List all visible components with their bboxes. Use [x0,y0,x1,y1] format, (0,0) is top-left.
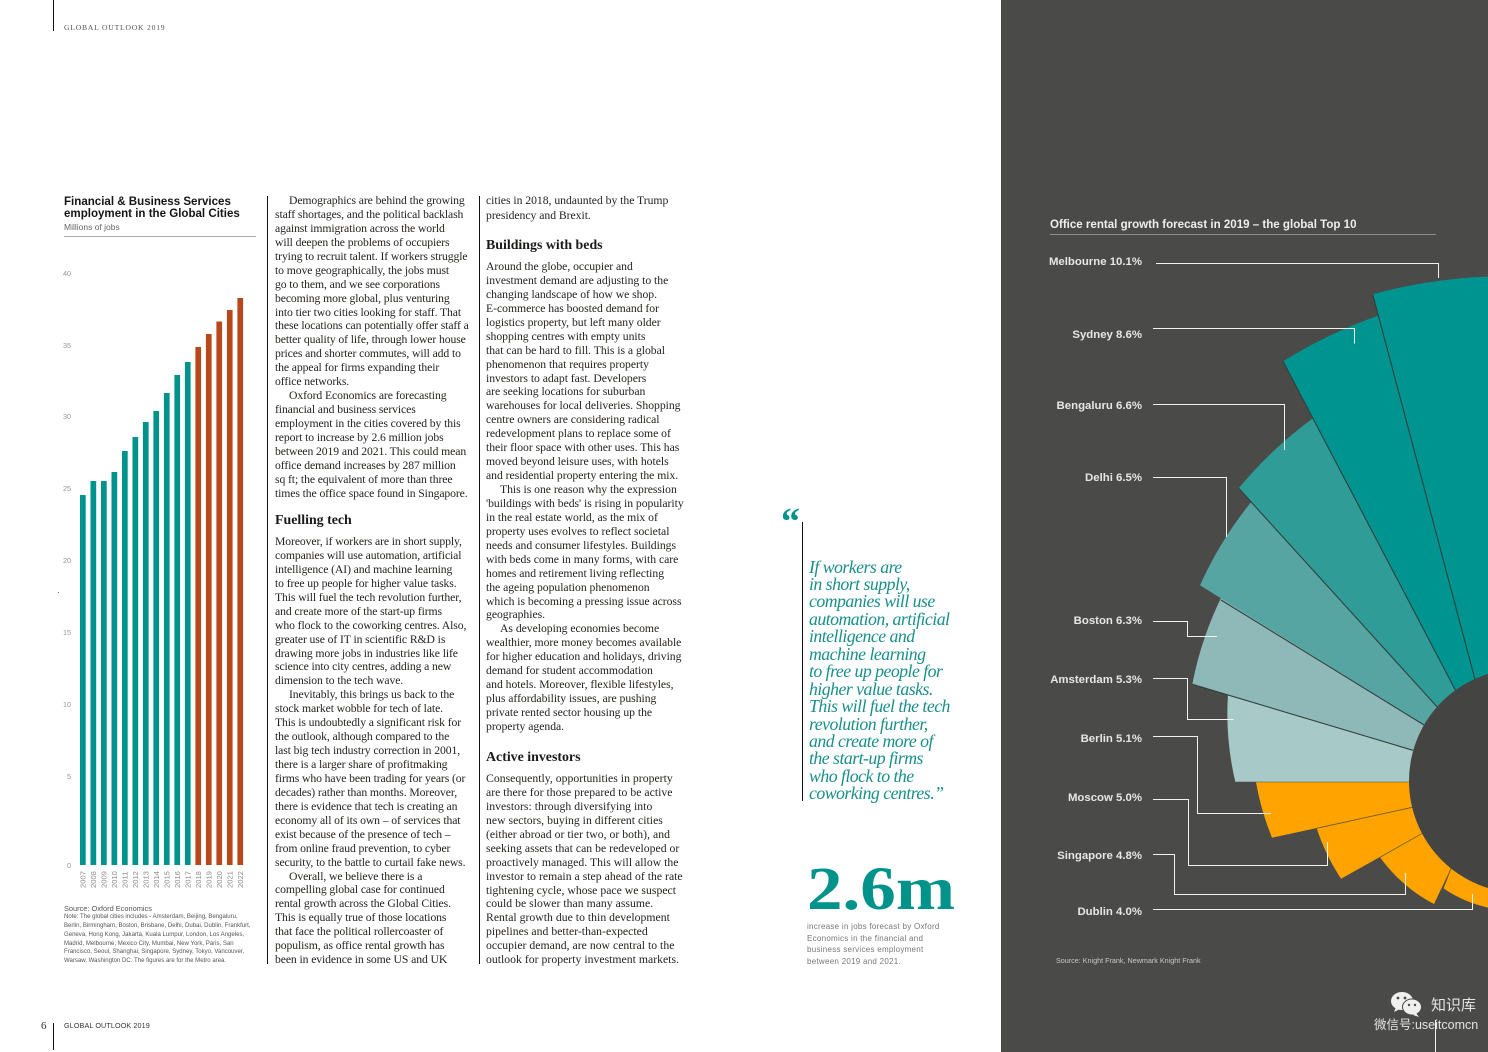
bar chart: employment: 2015 [162,871,171,888]
city labels: Boston 6.3% [1074,615,1142,627]
bar chart: employment: 2017 [183,871,192,888]
chart source and note: Note: The global cities includes - Amsterdam, Beijing, Bengaluru, Berlin, Birmingham, Boston, Brisbane, Delhi, Dubai, Dublin, Frankfurt, Geneva, Hong Kong, Jakarta, Kuala Lumpur, London, Los Angeles, Madrid, Melbourne, Mexico City, Mumbai, New York, Paris, San Francisco, Seoul, Shanghai, Singapore, Sydney, Tokyo, Vancouver, Warsaw, Washington DC. The figures are for the Metro area. [64,914,251,964]
city labels: Amsterdam 5.3% [1050,674,1142,686]
chart heading [64,196,256,237]
bar chart: employment: 10 [63,700,71,709]
city labels: Moscow 5.0% [1068,792,1142,804]
city labels: Bengaluru 6.6% [1057,400,1142,412]
city labels: Berlin 5.1% [1081,733,1142,745]
bar chart: employment: 0 [67,861,71,870]
bar chart: employment: 2010 [110,871,119,888]
carry-over text: cities in 2018, undaunted by the Trump presidency and Brexit. [486,194,668,222]
city labels: Melbourne 10.1% [1049,256,1142,268]
bar chart: employment: 25 [63,484,71,493]
Active investors text: Consequently, opportunities in property are there for those prepared to be active investors: through diversifying into new sectors, buying in different cities (either abroad or tier two, or both), and seeking assets that can be redeveloped or proactively managed. This will allow the investor to remain a step ahead of the rate tightening cycle, whose pace we suspect could be slower than many assume. Rental growth due to thin development pipelines and better-than-expected occupier demand, are now central to the outlook for property investment markets. [486,772,683,966]
icon: chat bubbles [1391,992,1421,1017]
bar chart: employment: 2018 [194,871,203,888]
stat caption: increase in jobs forecast by Oxford Economics in the financial and business services employment between 2019 and 2021. [807,922,940,966]
leader lines [1153,264,1472,910]
bar chart: employment: 2014 [152,871,161,888]
bar chart: employment: 2022 [236,871,245,888]
Buildings with beds text: Around the globe, occupier and investment demand are adjusting to the changing landscape of how we shop. E-commerce has boosted demand for logistics property, but left many older shopping centres with empty units that can be hard to fill. This is a global phenomenon that requires property investors to adapt fast. Developers are seeking locations for suburban warehouses for local deliveries. Shopping centre owners are considering radical redevelopment plans to replace some of their floor space with other uses. This has moved beyond leisure uses, with hotels and residential property entering the mix. This is one reason why the expression 'buildings with beds' is rising in popularity in the real estate world, as the mix of property uses evolves to reflect societal needs and consumer lifestyles. Buildings with beds come in many forms, with care homes and retirement living reflecting the ageing population phenomenon which is becoming a pressing issue across geographies. As developing economies become wealthier, more money becomes available for higher education and holidays, driving demand for student accommodation and hotels. Moreover, flexible lifestyles, plus affordability issues, are pushing private rented sector housing up the property agenda. [486,260,684,733]
bar chart: employment: 2019 [204,871,213,888]
page footer: GLOBAL OUTLOOK 2019 [64,1021,150,1030]
bar chart: employment: 2009 [100,871,108,888]
chart title: Office rental growth forecast in 2019 – the global Top 10 [1050,219,1356,231]
watermark: 微信号:useitcomcn [1374,1018,1478,1032]
bar chart: employment: 2020 [215,871,224,888]
panel: rental growth [1001,0,1488,1052]
bar chart: employment: 20 [63,556,71,565]
intro paragraphs: Demographics are behind the growing staff shortages, and the political backlash against immigration across the world will deepen the problems of occupiers trying to recruit talent. If workers struggle to move geographically, the jobs must go to them, and we see corporations becoming more global, plus venturing into tier two cities looking for staff. That these locations can potentially offer staff a better quality of life, through lower house prices and shorter commutes, will add to the appeal for firms expanding their office networks. Oxford Economics are forecasting financial and business services employment in the cities covered by this report to increase by 2.6 million jobs between 2019 and 2021. This could mean office demand increases by 287 million sq ft; the equivalent of more than three times the office space found in Singapore. [275,194,469,500]
bar chart: employment: 5 [67,772,71,781]
key statistic [807,856,955,966]
city labels: Delhi 6.5% [1085,472,1142,484]
chart hub [1409,669,1488,893]
heading: Fuelling tech: Fuelling tech [275,513,352,528]
page footer: 6 [41,1020,46,1032]
heading: Buildings with beds: Buildings with beds [486,238,603,253]
bar chart: employment: 2013 [141,871,150,888]
quotation mark: “ [781,500,800,542]
bar chart: employment: 2007 [78,871,88,888]
bar chart: employment [58,269,245,888]
bar chart: employment: 2016 [173,871,182,888]
pull quote [781,500,950,803]
chart source and note: Source: Oxford Economics [64,904,152,913]
bar chart: employment: 40 [63,269,71,278]
city labels: Dublin 4.0% [1077,906,1142,918]
chart title [1050,218,1436,235]
quote text: If workers are in short supply, companies will use automation, artificial intelligence and machine learning to free up people for higher value tasks. This will fuel the tech revolution further, and create more of the start-up firms who flock to the coworking centres.” [809,556,950,803]
bar chart: employment: 30 [63,412,71,421]
city labels: Singapore 4.8% [1057,850,1142,862]
heading: Active investors: Active investors [486,750,581,765]
page footer [41,1020,150,1050]
bar chart: employment: 2012 [131,871,140,888]
page header: GLOBAL OUTLOOK 2019 [64,23,165,32]
bar chart: employment: 2008 [89,871,98,888]
chart heading: Millions of jobs [64,222,120,232]
Fuelling tech text: Moreover, if workers are in short supply, companies will use automation, artificial intelligence (AI) and machine learning to free up people for higher value tasks. This will fuel the tech revolution further, and create more of the start-up firms who flock to the coworking centres. Also, greater use of IT in scientific R&D is drawing more jobs in industries like life science into city centres, adding a new dimension to the tech wave. Inevitably, this brings us back to the stock market wobble for tech of late. This is undoubtedly a significant risk for the outlook, although compared to the last big tech industry correction in 2001, there is a larger share of profitmaking firms who have been trading for years (or decades) rather than months. Moreover, there is evidence that tech is creating an economy all of its own – of services that exist because of the presence of tech – from online fraud prevention, to cyber security, to the battle to curtail fake news. Overall, we believe there is a compelling global case for continued rental growth across the Global Cities. This is equally true of those locations that face the political rollercoaster of populism, as office rental growth has been in evidence in some US and UK [275,535,466,966]
big number: 2.6m [807,856,955,923]
watermark: 知识库 [1431,994,1476,1015]
chart source: Source: Knight Frank, Newmark Knight Frank [1056,956,1201,965]
city labels: Sydney 8.6% [1072,329,1142,341]
bar chart: employment: 2021 [225,871,234,888]
bar chart: employment: 15 [63,628,71,637]
city labels [1049,256,1142,918]
text column one [275,194,469,966]
bar chart: employment: 35 [63,341,71,350]
watermark [1374,992,1478,1052]
chart heading: Financial & Business Services employment in the Global Cities [64,196,240,220]
text column two [486,194,684,966]
bar chart: employment: 2011 [120,872,130,888]
